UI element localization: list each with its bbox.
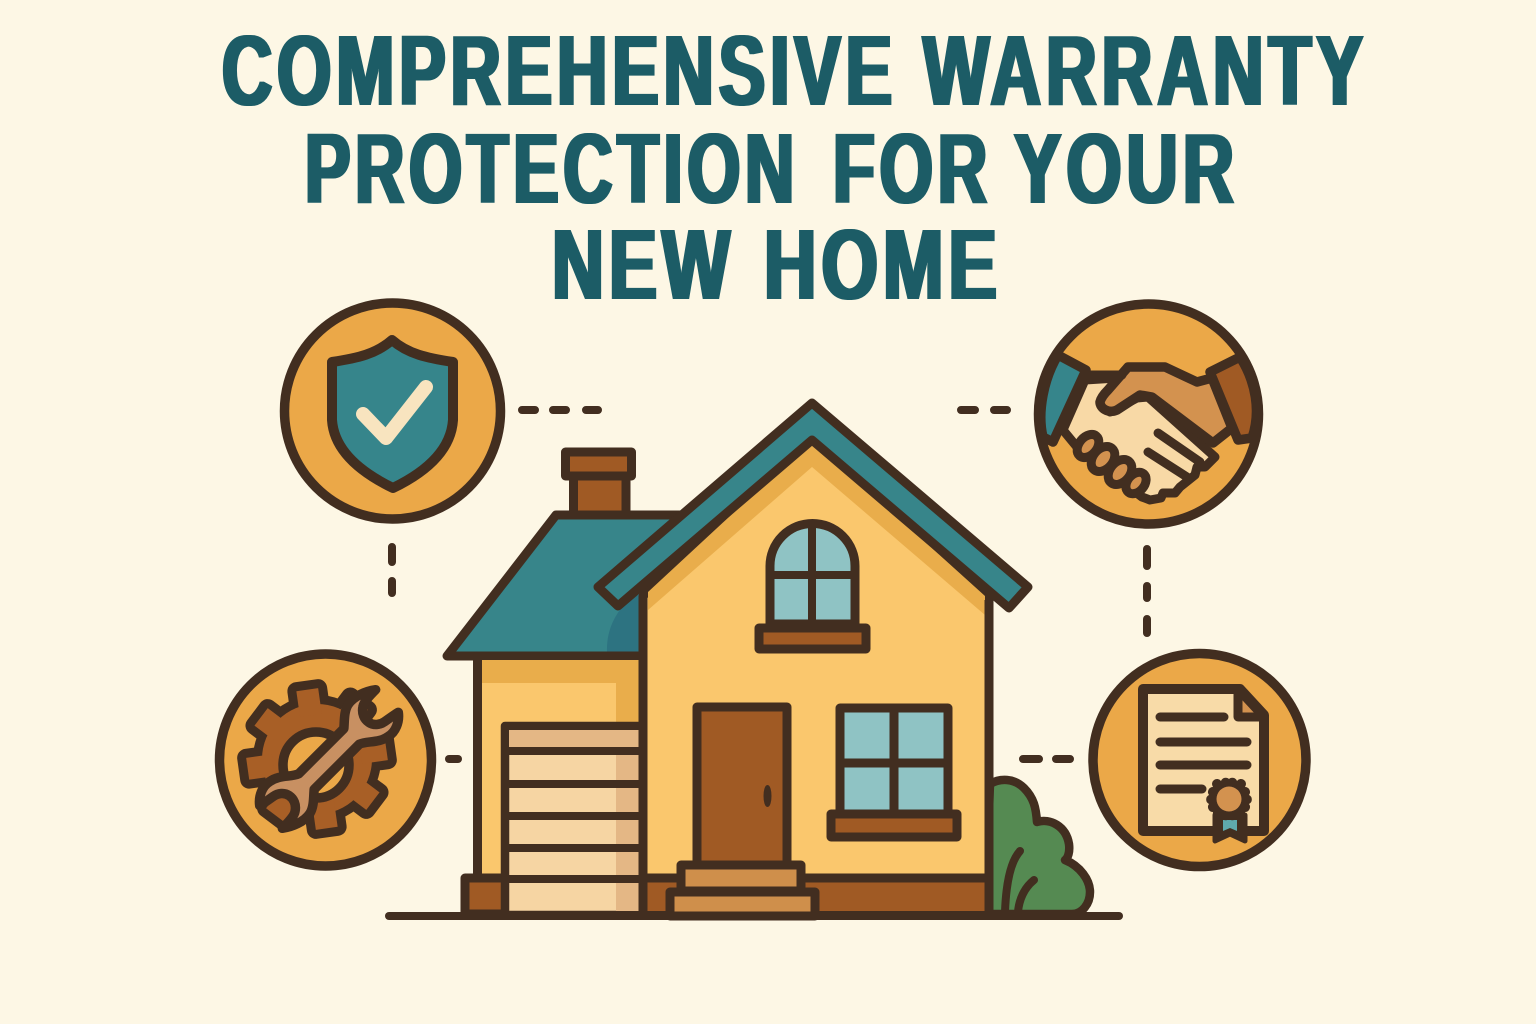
icon: warranty document xyxy=(1093,654,1306,866)
garage door xyxy=(505,726,643,915)
foundation line xyxy=(643,596,989,914)
attic window xyxy=(759,524,866,649)
title: FOR xyxy=(833,113,992,225)
garage roof xyxy=(447,515,690,656)
title: HOME xyxy=(764,209,1002,321)
front door xyxy=(697,707,787,867)
garage base xyxy=(465,878,507,914)
chimney xyxy=(566,452,632,518)
title: PROTECTION xyxy=(305,113,799,225)
bush xyxy=(985,780,1090,914)
icon: handshake xyxy=(1038,304,1258,524)
front window xyxy=(831,708,957,837)
foundation xyxy=(647,878,985,911)
garage wall xyxy=(478,656,648,880)
icon: shield with check mark xyxy=(284,303,500,519)
house illustration xyxy=(389,403,1119,916)
title xyxy=(222,15,1368,321)
title: COMPREHENSIVE xyxy=(222,15,897,127)
gable shadow xyxy=(648,440,985,615)
main wall xyxy=(643,440,989,914)
icon: gear and wrench xyxy=(220,654,432,866)
steps xyxy=(670,865,815,916)
title: YOUR xyxy=(1014,113,1239,225)
ground line xyxy=(389,912,1119,920)
title: NEW xyxy=(552,209,735,321)
main roof xyxy=(598,403,1028,608)
connector dashes xyxy=(392,410,1147,759)
